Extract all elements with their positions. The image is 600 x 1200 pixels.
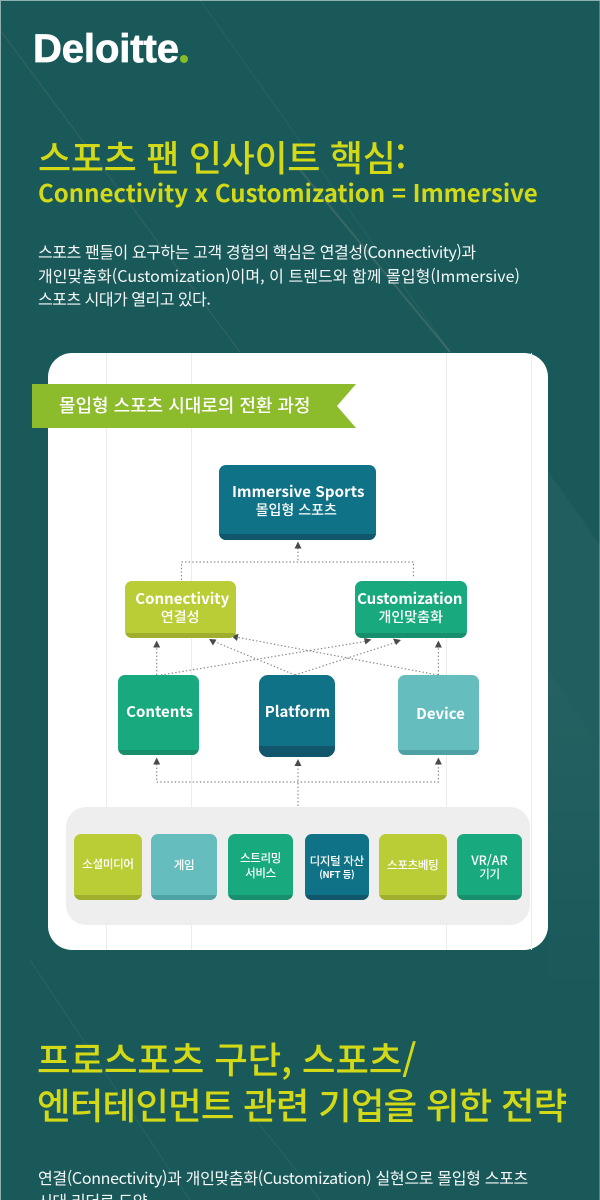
intro text xyxy=(38,239,520,310)
card: 게임: 게임 xyxy=(174,856,194,872)
intro text: 스포츠 시대가 열리고 있다. xyxy=(38,286,210,310)
card: VR/AR 기기: VR/AR xyxy=(471,850,508,868)
box: Connectivity: 연결성 xyxy=(161,606,200,626)
box: Device: Device xyxy=(416,703,465,724)
intro text: 개인맞춤화(Customization)이며, 이 트렌드와 함께 몰입형(Immersive) xyxy=(38,262,520,286)
box: Immersive Sports: 몰입형 스포츠 xyxy=(256,500,337,520)
closing text xyxy=(38,1166,528,1200)
box: Connectivity: Connectivity xyxy=(135,588,229,608)
box: Immersive Sports xyxy=(218,465,376,540)
heading: strategy: 프로스포츠 구단, 스포츠/ xyxy=(37,1031,416,1084)
box: Contents: Contents xyxy=(126,701,193,722)
card: 게임 xyxy=(151,834,217,900)
title: 스포츠 팬 인사이트 핵심: xyxy=(38,130,406,182)
card: 디지털 자산: 디지털 자산 xyxy=(310,852,364,868)
box: Customization: 개인맞춤화 xyxy=(379,606,443,626)
box: Contents xyxy=(118,675,199,755)
card: 스트리밍 서비스: 서비스 xyxy=(245,864,276,880)
heading: strategy: 엔터테인먼트 관련 기업을 위한 전략 xyxy=(37,1076,566,1130)
card: 스포츠베팅: 스포츠베팅 xyxy=(387,856,438,872)
card: 스트리밍 서비스: 스트리밍 xyxy=(240,850,281,866)
box: Customization xyxy=(355,580,466,638)
subtitle: Connectivity x Customization = Immersive xyxy=(38,174,538,209)
card: 디지털 자산 xyxy=(304,834,369,900)
box: Customization: Customization xyxy=(357,588,462,608)
logo: Deloitte: Deloitte xyxy=(33,27,179,71)
card: 소셜미디어 xyxy=(74,834,142,900)
card: 소셜미디어: 소셜미디어 xyxy=(82,856,134,872)
card: VR/AR 기기 xyxy=(457,834,522,900)
heading: strategy xyxy=(37,1031,566,1130)
box: Connectivity xyxy=(124,580,236,638)
panel: transition diagram xyxy=(48,353,548,950)
box: Immersive Sports: Immersive Sports xyxy=(232,481,365,502)
box: Platform: Platform xyxy=(265,701,330,722)
intro text: 스포츠 팬들이 요구하는 고객 경험의 핵심은 연결성(Connectivity)과 xyxy=(38,239,476,263)
card: 스트리밍 서비스 xyxy=(228,834,293,900)
panel: foundation categories xyxy=(66,807,530,925)
card: 스포츠베팅 xyxy=(379,834,446,900)
banner: section heading xyxy=(32,384,356,428)
card: 디지털 자산: (NFT 등) xyxy=(319,866,354,880)
banner: section heading: 몰입형 스포츠 시대로의 전환 과정 xyxy=(59,392,310,418)
box: Device xyxy=(398,675,479,755)
box: Platform xyxy=(258,675,334,757)
card: VR/AR 기기: 기기 xyxy=(479,866,500,882)
